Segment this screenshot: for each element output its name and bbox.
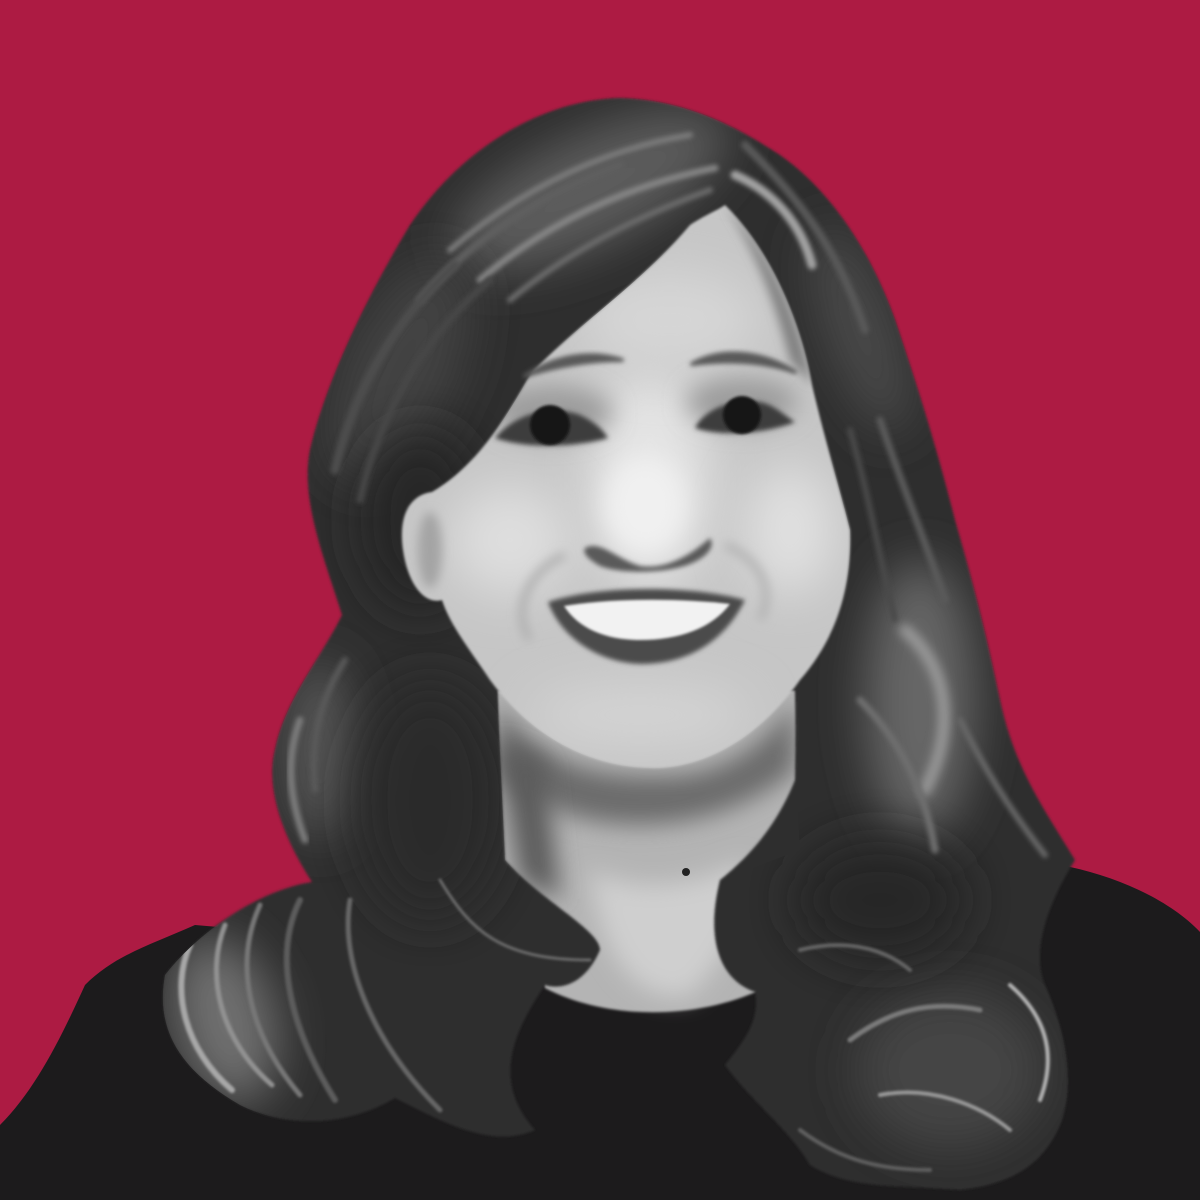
shirt <box>0 865 1200 1200</box>
hair <box>155 77 1075 1190</box>
face <box>402 205 850 768</box>
eye left <box>495 405 608 446</box>
eyebrow left <box>525 355 622 376</box>
nose <box>584 455 712 572</box>
hair backing behind neck <box>470 640 820 900</box>
neck <box>497 690 800 1012</box>
eyebrow right <box>692 354 795 372</box>
face shading <box>418 205 835 745</box>
teeth <box>564 600 730 640</box>
neck mole <box>682 868 690 876</box>
hair strands <box>181 135 1048 1170</box>
eye right <box>695 396 795 434</box>
hair tonal areas <box>155 77 1045 1150</box>
mouth <box>548 589 745 664</box>
